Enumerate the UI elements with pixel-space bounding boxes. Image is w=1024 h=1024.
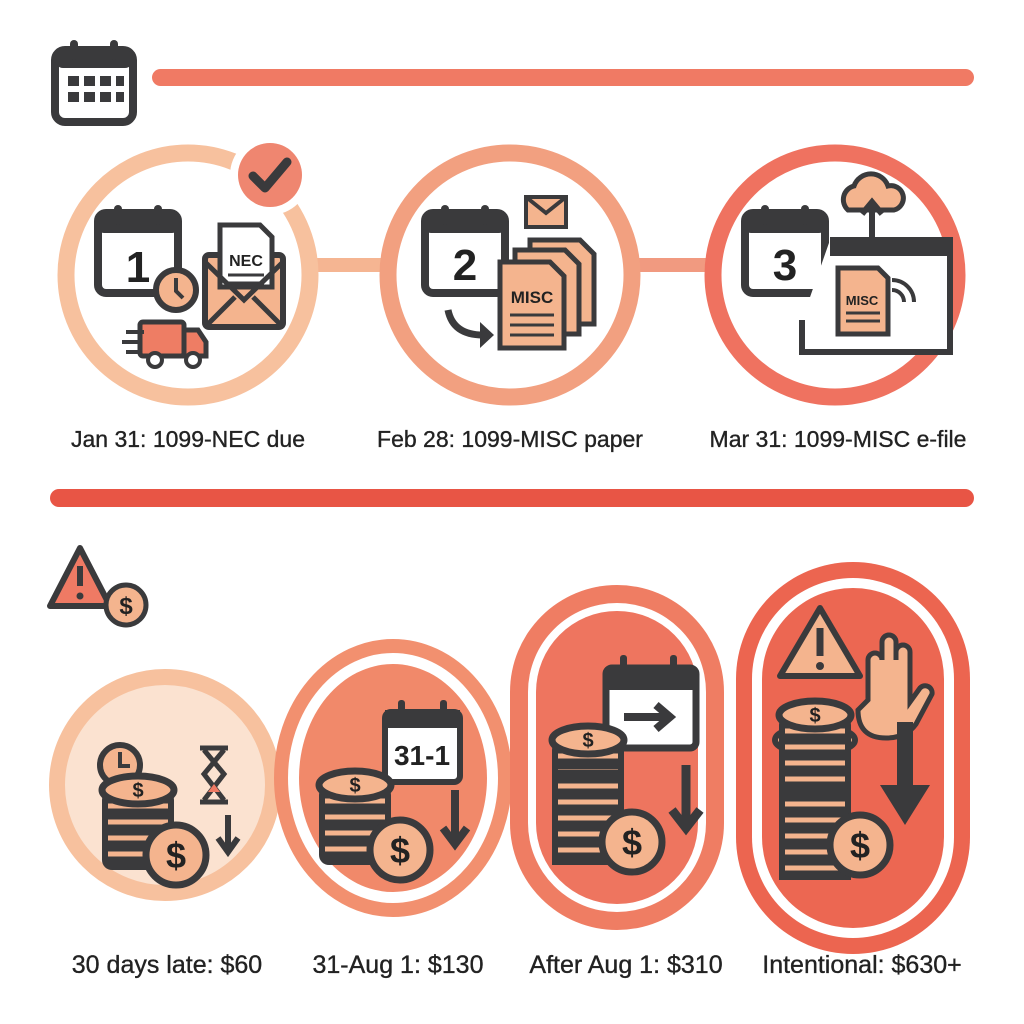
icon: check badge (230, 135, 310, 215)
icon: calendar 31-1 (385, 700, 460, 782)
panel: Mar 31 circle (713, 153, 957, 397)
label: Mar 31: Mar 31: 1099-MISC e-file (710, 426, 966, 452)
icon: calendar arrow (606, 655, 696, 748)
icon: MISC documents: MISC (511, 288, 553, 307)
icon: calendar 1: 1 (126, 243, 150, 292)
icon: curved arrow (448, 310, 494, 348)
icon: clock (100, 745, 140, 785)
icon: MISC documents (500, 240, 594, 348)
icon: warning (780, 608, 860, 676)
icon: down arrow (218, 815, 238, 852)
label: After Aug 1: After Aug 1: $310 (529, 951, 723, 979)
icon: envelope NEC (205, 225, 283, 327)
icon: calendar 3: 3 (773, 241, 797, 290)
icon: calendar 3 (745, 205, 825, 293)
middle divider bar (50, 489, 974, 507)
icon: envelope NEC: NEC (229, 253, 263, 270)
icon: hourglass (200, 748, 228, 802)
panel: 31-Aug 1 (281, 646, 505, 910)
label: 30 days late: 30 days late: $60 (72, 951, 262, 979)
panel: After Aug 1 (510, 585, 724, 930)
panel: Feb 28 circle (388, 153, 632, 397)
icon: warning with dollar (50, 548, 146, 625)
icon: calendar 31-1: 31-1 (394, 740, 450, 771)
icon: browser window (802, 240, 950, 352)
label: Intentional: Intentional: $630+ (762, 951, 962, 979)
top timeline bar (152, 69, 974, 86)
icon: calendar 1 (98, 205, 196, 310)
label: Feb 28: Feb 28: 1099-MISC paper (377, 426, 643, 452)
icon: calendar 2: 2 (453, 241, 477, 290)
icon: browser window: MISC (846, 293, 879, 308)
icon: warning with dollar: $ (119, 593, 133, 620)
icon: mail (526, 197, 566, 227)
connectors (312, 258, 714, 272)
icon: hand (858, 635, 932, 738)
icon: truck (122, 322, 206, 367)
panel: Intentional (736, 562, 970, 954)
label: Jan 31: Jan 31: 1099-NEC due (71, 426, 305, 452)
label: 31-Aug 1: 31-Aug 1: $130 (313, 951, 483, 979)
panel: Jan 31 circle (66, 135, 310, 397)
icon: cloud upload (843, 174, 903, 240)
icon: header calendar (55, 40, 133, 122)
panel: 30 days late (57, 677, 273, 893)
icon: calendar 2 (425, 205, 505, 293)
